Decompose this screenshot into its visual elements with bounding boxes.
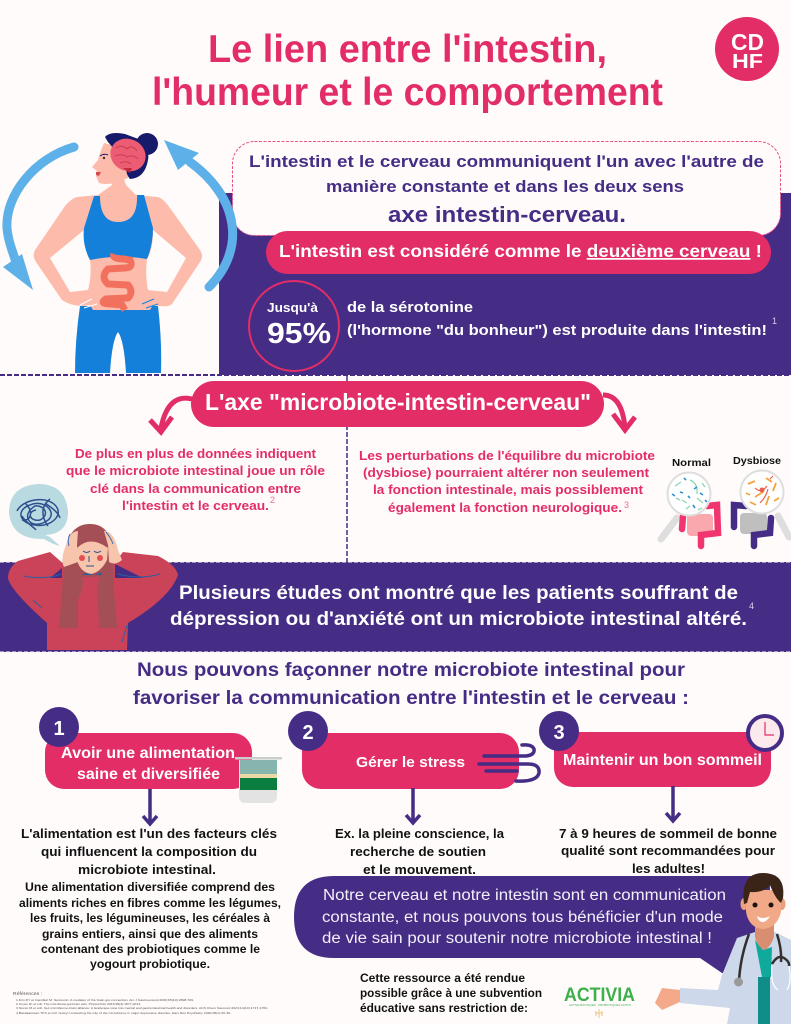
text block: diet details: contenant des probiotiques comme le [41,944,260,956]
text block: stress details [335,827,505,877]
title: l'humeur et le comportement [152,71,663,114]
stat: 95% circle [249,281,339,371]
text block: dysbiosis: Les perturbations de l'équilibre du microbiote [359,449,655,463]
text block: sleep details: 7 à 9 heures de sommeil de bonne [559,827,777,841]
logo: Activia [564,985,635,1018]
text block: diet details: grains entiers, ainsi que des aliments [42,929,258,941]
callout: closing speech bubble: de vie sain pour soutenir notre microbiote intestinal ! [322,930,712,947]
text block: patients altered microbiota: Plusieurs études ont montré que les patients souffrant de [179,583,738,604]
arrow: pink left [150,398,192,432]
panel: top purple block [219,193,791,375]
step 3: sleep: Maintenir un bon sommeil [563,752,762,769]
scrubs [755,940,772,977]
text block: patients altered microbiota: dépression ou d'anxiété ont un microbiote intestinal altéré. [170,609,747,630]
icon: normal gut under magnifier: Normal [672,458,711,469]
stat: 95% circle: Jusqu'à [267,301,318,315]
callout: closing speech bubble: Notre cerveau et notre intestin sont en communication [323,887,726,904]
text block: diet details [19,827,281,971]
arrow: curved left-side blue [3,147,74,290]
text block: diet details: microbiote intestinal. [78,863,216,877]
hair [743,873,783,904]
text block: microbiote role [66,447,325,513]
hand [655,988,680,1010]
heading pill: axe microbiote-intestin-cerveau [191,381,604,427]
arrow: step 3 [666,786,680,821]
callout: closing speech bubble: constante, et nous pouvons tous bénéficier d'un mode [322,909,723,926]
text block: sponsorship [360,973,542,1015]
step 1: diet: 1 [53,718,65,740]
text block: serotonin: 1 [772,316,777,326]
callout: gut-brain communication [232,142,780,236]
text block: microbiote role: clé dans la communication entre [90,482,301,496]
title: Le lien entre l'intestin, [208,28,607,71]
icon: wind [479,745,539,781]
icon: normal gut under magnifier [661,458,718,546]
logo: CDHF: CD [731,29,764,55]
text block: sleep details [559,827,777,876]
step 2: stress [288,711,539,789]
text block: stress details: recherche de soutien [350,845,486,859]
step 1: diet: saine et diversifiée [77,766,220,783]
step 2: stress: 2 [302,722,314,744]
arrow: step 1 [143,789,157,824]
step 1: diet: Avoir une alimentation [61,745,235,762]
text block: diet details: Une alimentation diversifiée comprend des [25,882,275,894]
text block: diet details: qui influencent la composition du [41,845,257,859]
text block: sleep details: qualité sont recommandées pour [561,844,775,858]
arrow: curved right-side blue [164,140,233,287]
icon: dysbiosis gut under magnifier [733,456,789,546]
stat: 95% circle: 95% [267,318,331,350]
head [740,898,748,910]
text block: dysbiosis: 3 [624,500,629,510]
text block: dysbiosis: également la fonction neurologique. [388,501,622,515]
sweater [8,552,178,650]
icon: intestine [103,254,131,310]
figure legs [75,306,161,373]
step 3: sleep [539,711,782,787]
illustration: woman with brain and gut [34,133,202,373]
arm shadow [50,564,143,578]
callout: gut-brain communication: L'intestin et le cerveau communiquent l'un avec l'autre de [249,153,764,171]
references: 1.Kim DY et Camilleri M. Serotonin: A mediator of the brain-gut connection. Am J Gastroenterol 2000;95(10):2698-709. [16,998,194,1002]
brain [105,133,151,177]
references: 2.Cryan JF et coll. The microbiota-gut-brain axis. Physiol Rev 2019;99(4):1877-2013. [16,1002,141,1006]
text block: serotonin [347,300,777,339]
title [152,28,663,114]
icon: clock [748,716,782,750]
banner: deuxième cerveau: L'intestin est considéré comme le deuxième cerveau ! [279,241,762,261]
face [77,542,108,574]
text block: diet details: aliments riches en fibres comme les légumes, [19,898,281,910]
logo: Activia: ACTIVE BIOTIQUES · PROBIOTIQUES ACTIFS [569,1003,631,1007]
sports top [84,195,153,260]
heading: shaping microbiota: favoriser la communication entre l'intestin et le cerveau : [133,688,689,709]
neck [755,925,774,950]
stethoscope [739,934,789,982]
face [92,143,132,184]
step 1: diet [39,707,282,803]
text block: diet details: L'alimentation est l'un des facteurs clés [21,827,277,841]
coat [680,932,791,1024]
heading pill: axe microbiote-intestin-cerveau: L'axe "microbiote-intestin-cerveau" [205,389,591,415]
text block: microbiote role: que le microbiote intestinal joue un rôle [66,464,325,478]
arrow: step 2 [406,788,420,823]
step 2: stress: Gérer le stress [356,754,465,771]
callout: gut-brain communication: manière constante et dans les deux sens [326,178,684,196]
text block: dysbiosis [359,449,655,515]
text block: sponsorship: Cette ressource a été rendue [360,973,525,985]
text block: sponsorship: éducative sans restriction de: [360,1003,528,1015]
text block: diet details: yogourt probiotique. [90,959,210,971]
text block: stress details: et le mouvement. [363,863,476,877]
text block: dysbiosis: (dysbiose) pourraient altérer non seulement [363,466,650,480]
callout: gut-brain communication: axe intestin-cerveau. [388,202,626,227]
text block: microbiote role: De plus en plus de données indiquent [75,447,317,461]
text block: microbiote role: l'intestin et le cerveau. [122,499,269,513]
logo: Activia: ACTIVIA [564,985,635,1006]
heading: shaping microbiota: Nous pouvons façonner notre microbiote intestinal pour [137,660,686,681]
icon: yogurt [235,757,282,803]
text block: dysbiosis: la fonction intestinale, mais possiblement [373,483,644,497]
references: 4.Bastiaanssen TFS et coll. Gutsy! Unraveling the role of the microbiome in major depressive disorder. Harv Rev Psychiatry 2020;28(1):26-39. [16,1011,231,1015]
hair [105,133,148,179]
illustration: distressed woman [8,524,178,650]
illustration: doctor [655,873,791,1024]
text block: patients altered microbiota [170,583,754,630]
text block: sponsorship: possible grâce à une subvention [360,988,542,1000]
callout: closing speech bubble [294,876,770,975]
text block: microbiote role: 2 [270,495,275,505]
references [13,991,268,1015]
arm gaps [50,230,91,292]
icon: dysbiosis gut under magnifier: Dysbiose [733,456,781,467]
step 3: sleep: 3 [553,722,565,744]
hair [59,524,117,628]
figure skin [34,172,202,310]
logo: CDHF [715,17,779,81]
banner: deuxième cerveau [266,231,771,274]
hands [62,531,78,567]
logo: CDHF: HF [732,51,763,73]
text block: diet details: les fruits, les légumineuses, les céréales à [30,913,271,925]
arrow: pink right [603,395,635,430]
face details [100,154,108,156]
references: 3.Socco M et coll. Gut microbiome-brain alliance: A landscape view into mental and gastrointestinal health and disorders. ACS Chem Neurosci 2023;14(10):1717-1763. [16,1006,268,1010]
text block: serotonin: de la sérotonine [347,300,473,316]
text block: patients altered microbiota: 4 [749,601,754,611]
text block: serotonin: (l'hormone "du bonheur") est produite dans l'intestin! [347,323,767,339]
references: Références : [13,991,42,997]
text block: stress details: Ex. la pleine conscience, la [335,827,505,841]
illustration: thought bubble with scribble [9,484,68,546]
panel: patients band [0,562,791,652]
hands [80,299,97,308]
heading: shaping microbiota [133,660,689,709]
text block: sleep details: les adultes! [632,862,705,876]
